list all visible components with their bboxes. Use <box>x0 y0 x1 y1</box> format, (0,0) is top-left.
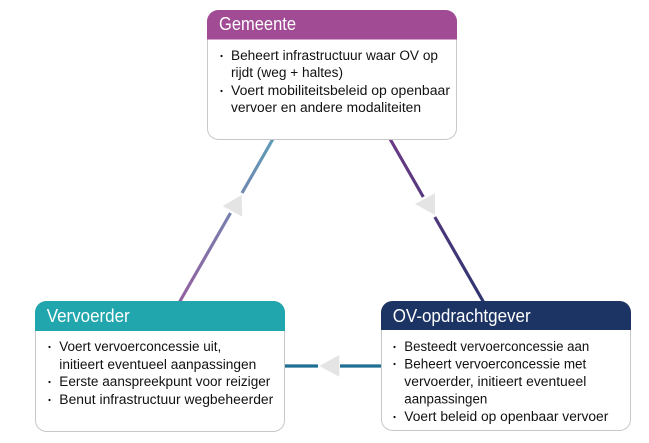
vervoerder bullets <box>48 339 274 407</box>
gemeente bullets: rijdt (weg + haltes) <box>231 65 343 80</box>
vervoerder bullets: Benut infrastructuur wegbeheerder <box>59 392 274 407</box>
panel: gemeente <box>207 10 457 140</box>
panel: ov-opdrachtgever <box>381 301 631 430</box>
gemeente bullets: Beheert infrastructuur waar OV op <box>231 48 438 63</box>
ov-opdrachtgever header <box>381 301 631 330</box>
vervoerder bullets: Eerste aanspreekpunt voor reiziger <box>59 374 271 389</box>
ov-opdrachtgever bullets: Voert beleid op openbaar vervoer <box>404 409 609 424</box>
arrow: vervoerder to gemeente <box>180 138 274 302</box>
ov-opdrachtgever bullets: Beheert vervoerconcessie met <box>404 356 587 372</box>
vervoerder bullets: Voert vervoerconcessie uit, <box>59 339 221 354</box>
vervoerder bullets: initieert eventueel aanpassingen <box>59 357 256 372</box>
gemeente bullets: vervoer en andere modaliteiten <box>231 100 421 115</box>
ov-opdrachtgever bullets <box>393 339 609 424</box>
gemeente bullets <box>220 48 451 115</box>
arrow: ov-opdrachtgever to vervoerder <box>284 355 382 377</box>
gemeente title: Gemeente <box>219 14 296 34</box>
vervoerder title: Vervoerder <box>47 306 130 326</box>
vervoerder header <box>35 301 285 331</box>
gemeente header <box>207 10 457 40</box>
arrow: gemeente to ov-opdrachtgever <box>390 138 484 302</box>
ov-opdrachtgever title: OV-opdrachtgever <box>393 306 531 326</box>
panel: vervoerder <box>35 301 285 432</box>
gemeente bullets: Voert mobiliteitsbeleid op openbaar <box>231 83 451 98</box>
ov-opdrachtgever bullets: vervoerder, initieert eventueel <box>404 374 586 389</box>
ov-opdrachtgever bullets: aanpassingen <box>404 392 487 406</box>
ov-opdrachtgever bullets: Besteedt vervoerconcessie aan <box>404 339 589 354</box>
